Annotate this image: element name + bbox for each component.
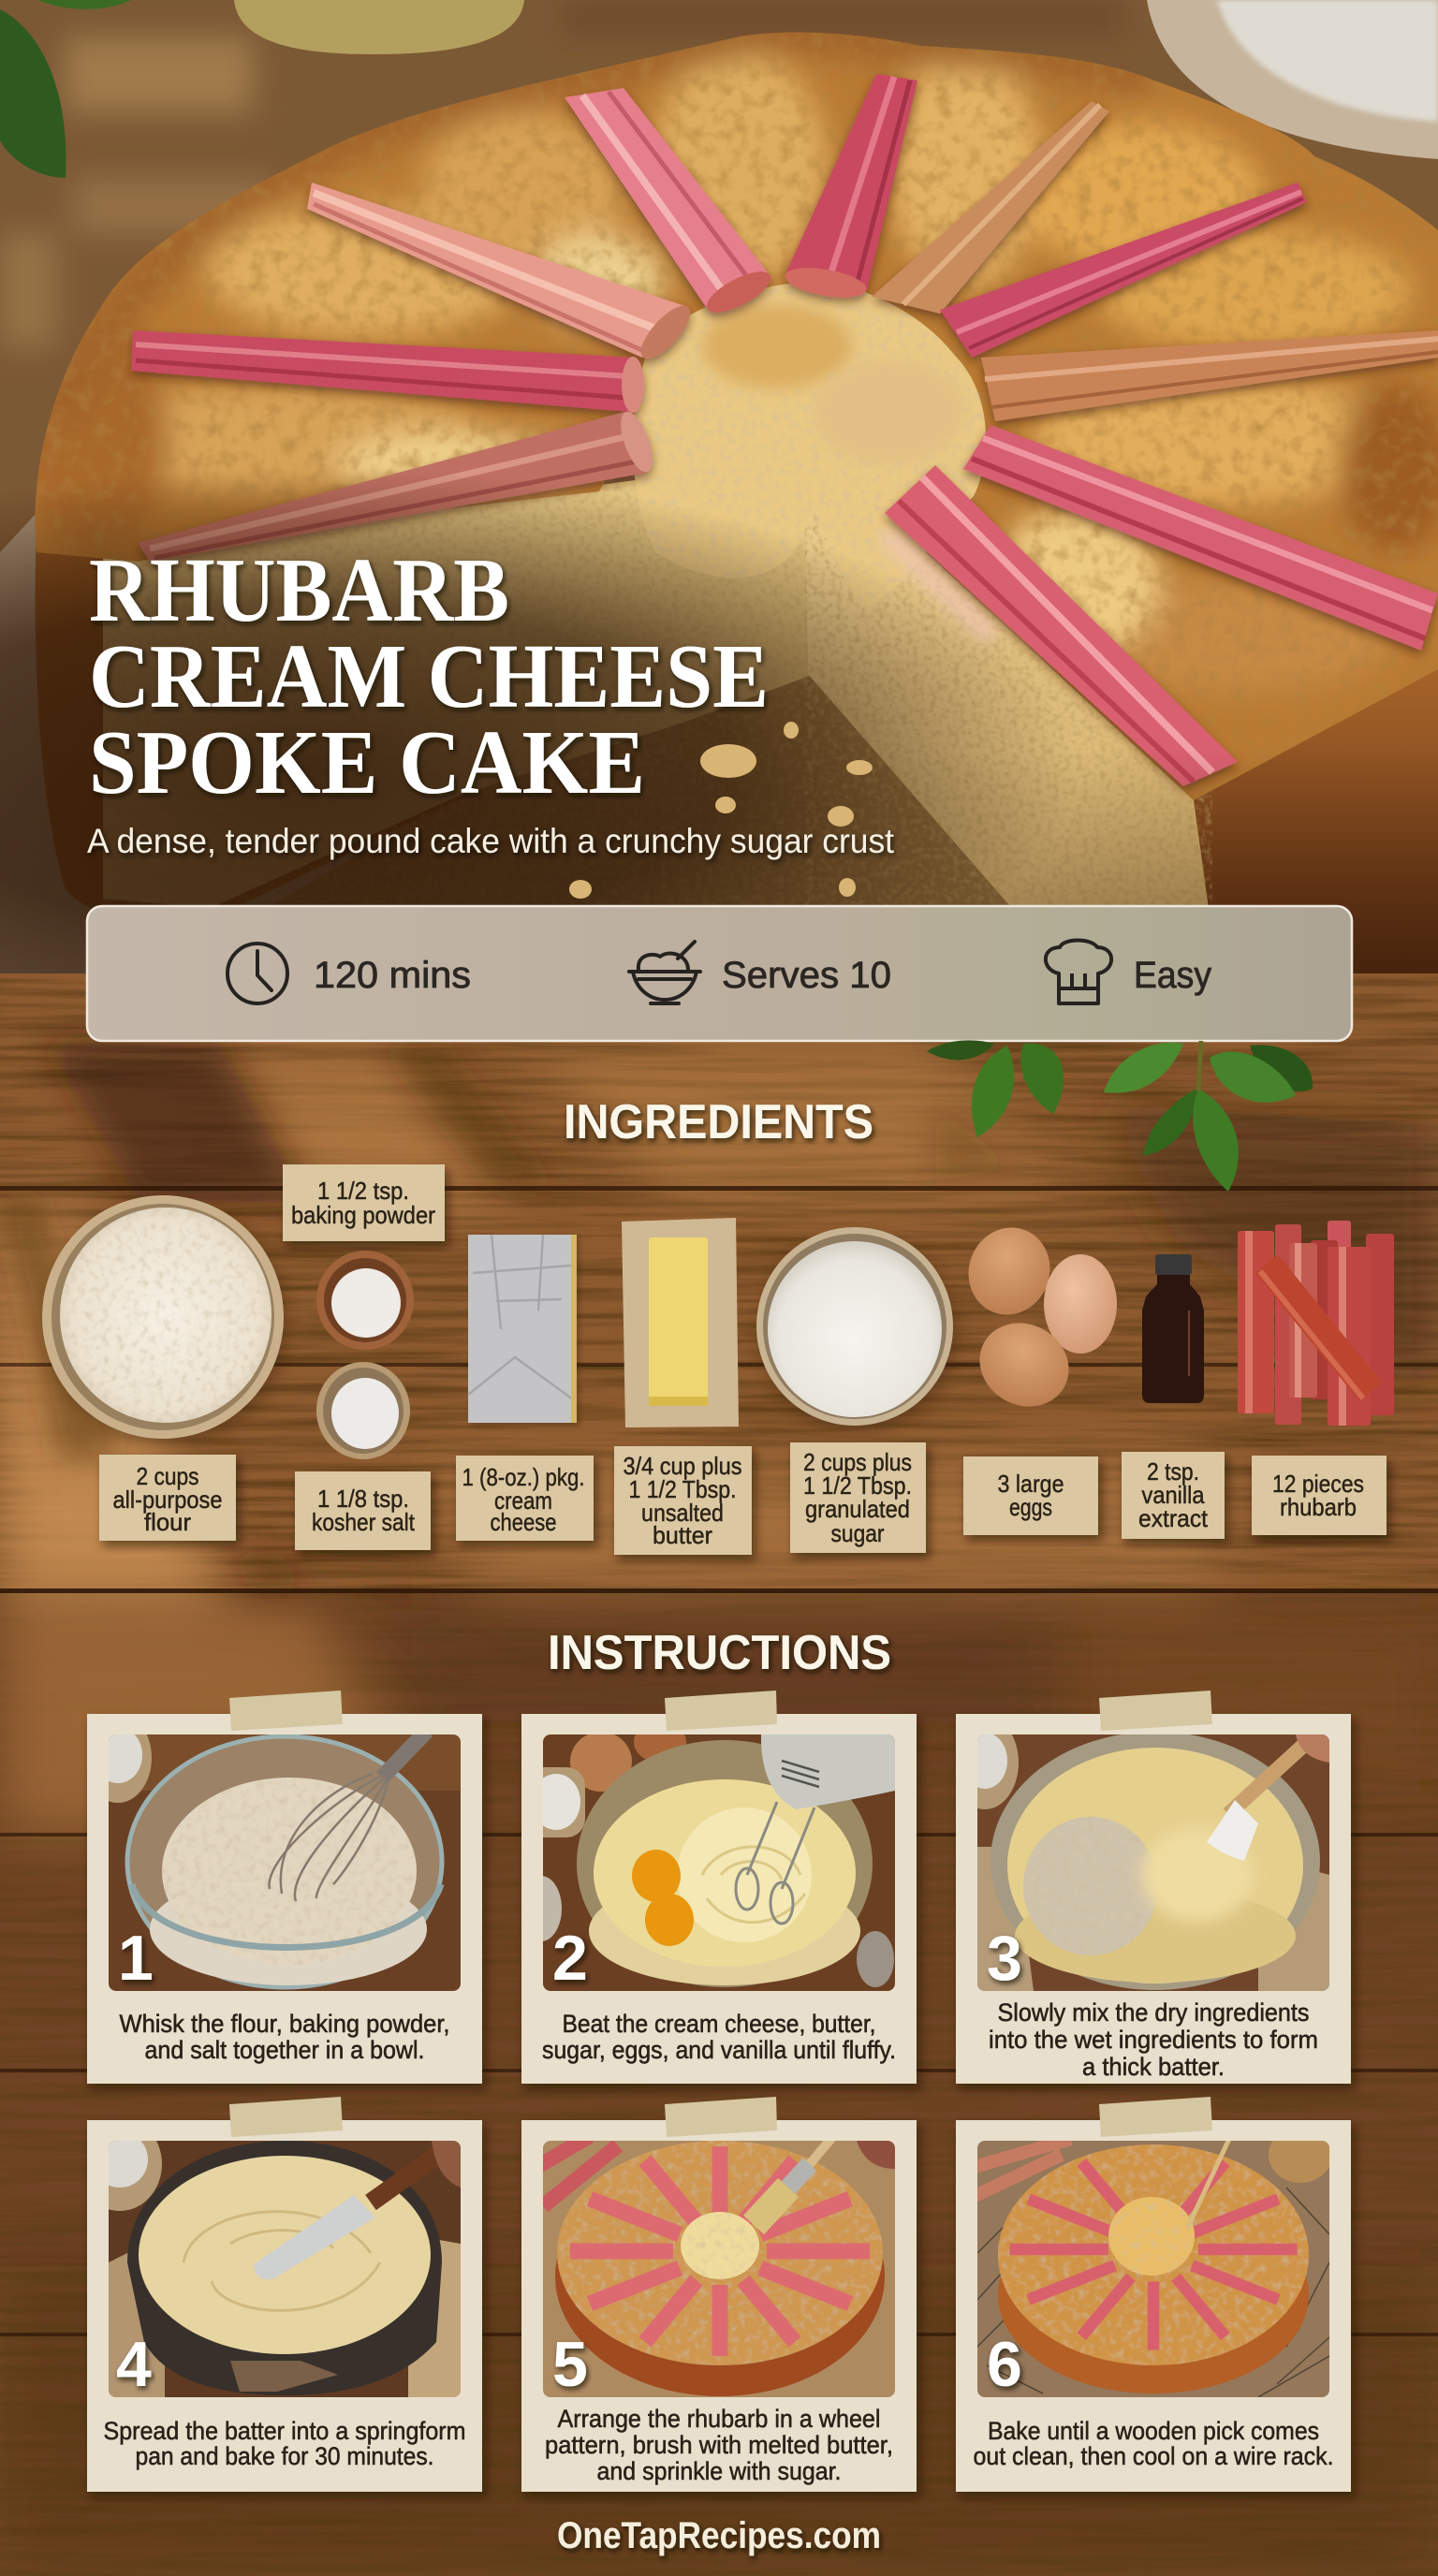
caption: a thick batter. — [1082, 2053, 1225, 2081]
label: flour: flour — [144, 1508, 191, 1536]
icon: clock — [227, 944, 287, 1003]
crumb centre mound — [633, 281, 986, 608]
heading: instructions: INSTRUCTIONS — [548, 1626, 891, 1680]
label: vanilla: vanilla — [1142, 1481, 1205, 1509]
label: cream cheese: cream — [494, 1486, 552, 1515]
step card 1 — [84, 1690, 482, 2084]
label: vanilla — [1122, 1452, 1225, 1539]
label: rhubarb: rhubarb — [1280, 1493, 1357, 1521]
tape — [229, 1690, 343, 1731]
label: rhubarb: 12 pieces — [1272, 1470, 1364, 1498]
ingredient: eggs — [957, 1216, 1117, 1535]
caption: Beat the cream cheese, butter, — [562, 2010, 876, 2038]
wood table background — [0, 964, 1438, 2576]
caption: pan and bake for 30 minutes. — [135, 2442, 434, 2470]
photo: whisking flour — [109, 1734, 461, 1991]
ingredient: flour — [42, 1195, 287, 1541]
label: rhubarb — [1252, 1456, 1387, 1535]
tape — [1099, 2097, 1212, 2137]
photo: spreading batter in pan — [78, 2117, 461, 2397]
title: RHUBARB — [89, 540, 509, 640]
caption — [545, 2405, 893, 2485]
difficulty text: Easy — [1134, 955, 1211, 996]
title: SPOKE CAKE — [89, 712, 645, 812]
photo: arranging rhubarb — [534, 2136, 895, 2397]
footer website: OneTapRecipes.com — [557, 2515, 881, 2556]
step card 4 — [78, 2097, 482, 2492]
crumbs on plate — [569, 722, 873, 899]
label: sugar: sugar — [831, 1519, 885, 1547]
photo: cooling on rack — [968, 2127, 1332, 2397]
servings text: Serves 10 — [722, 955, 891, 996]
tape — [229, 2097, 343, 2137]
decorative leaves — [927, 1040, 1313, 1192]
ingredient: vanilla extract — [1122, 1254, 1225, 1539]
caption: pattern, brush with melted butter, — [545, 2431, 893, 2459]
spoke top — [783, 74, 917, 302]
label: butter: 1 1/2 Tbsp. — [629, 1475, 736, 1503]
tape — [665, 2097, 777, 2137]
label: cream cheese — [456, 1456, 594, 1541]
label: eggs: eggs — [1009, 1493, 1052, 1521]
caption: Spread the batter into a springform — [103, 2417, 466, 2445]
spoke lower left — [138, 408, 659, 562]
caption: Slowly mix the dry ingredients — [998, 1998, 1309, 2027]
step card 6 — [956, 2097, 1351, 2492]
label: kosher salt: 1 1/8 tsp. — [317, 1485, 409, 1513]
caption — [974, 2417, 1333, 2470]
caption — [120, 2010, 449, 2064]
rhubarb spokes — [131, 74, 1438, 786]
caption: and sprinkle with sugar. — [597, 2457, 841, 2485]
label: baking powder — [283, 1164, 445, 1241]
label: sugar: 2 cups plus — [803, 1448, 912, 1476]
label: sugar: granulated — [805, 1495, 910, 1523]
caption: Whisk the flour, baking powder, — [120, 2010, 449, 2038]
ingredient: cream cheese — [456, 1235, 594, 1541]
caption: out clean, then cool on a wire rack. — [974, 2442, 1333, 2470]
title — [89, 540, 769, 812]
left crumb face — [103, 421, 814, 908]
label: flour: 2 cups — [137, 1462, 198, 1490]
plate wedge under cut — [187, 655, 1020, 955]
icon: chef hat — [1046, 940, 1111, 1003]
icon: bowl — [629, 942, 700, 1003]
ingredient: sugar — [756, 1227, 957, 1553]
spoke top left — [565, 88, 776, 320]
caption: into the wet ingredients to form — [989, 2026, 1318, 2054]
spoke bottom right — [885, 465, 1238, 786]
heading: ingredients: INGREDIENTS — [564, 1095, 873, 1149]
tape — [665, 1690, 777, 1731]
darker baked rim — [84, 33, 1153, 352]
number: 5 — [552, 2329, 588, 2400]
caption: Bake until a wooden pick comes — [988, 2417, 1319, 2445]
tape — [1099, 1690, 1212, 1731]
caption — [542, 2010, 896, 2064]
caption: Arrange the rhubarb in a wheel — [558, 2405, 880, 2433]
label: vanilla: extract — [1138, 1504, 1209, 1532]
spoke lower right — [963, 425, 1438, 651]
label: butter: 3/4 cup plus — [624, 1452, 741, 1480]
spoke upper left — [307, 183, 697, 366]
hero backdrop wood — [0, 0, 1438, 973]
ingredient: butter — [614, 1218, 752, 1555]
spoke red right — [940, 183, 1307, 358]
label: butter: unsalted — [641, 1499, 724, 1527]
spoke tan right — [981, 330, 1438, 421]
label: cream cheese: 1 (8-oz.) pkg. — [462, 1463, 584, 1491]
label: sugar — [790, 1442, 926, 1553]
title: CREAM CHEESE — [89, 626, 769, 726]
label: eggs — [963, 1456, 1098, 1535]
light and shadow patches on table — [0, 1048, 1438, 2576]
caption: sugar, eggs, and vanilla until fluffy. — [542, 2036, 896, 2064]
right cut face — [805, 431, 1212, 936]
cake crust top — [35, 32, 1438, 800]
pink juice smear — [885, 532, 992, 638]
title darkening overlay — [0, 468, 1438, 973]
label: cream cheese: cheese — [491, 1508, 556, 1536]
serving plate — [0, 513, 1049, 973]
ingredient: rhubarb — [1238, 1221, 1394, 1535]
photo: beating batter — [543, 1734, 895, 1991]
cake outer side — [36, 524, 468, 920]
number: 1 — [118, 1923, 154, 1994]
step card 2 — [521, 1690, 917, 2084]
label: baking powder: baking powder — [291, 1201, 435, 1229]
spoke left — [131, 330, 644, 413]
leaf top left — [0, 0, 131, 178]
spoke tan top right — [872, 101, 1109, 314]
number: 2 — [552, 1923, 588, 1994]
plank gaps — [0, 1186, 1438, 2336]
number: 6 — [987, 2329, 1022, 2400]
label: butter: butter — [653, 1521, 712, 1549]
ingredient: baking powder — [283, 1164, 445, 1350]
label: butter — [614, 1446, 752, 1555]
step card 3 — [951, 1690, 1351, 2084]
label: baking powder: 1 1/2 tsp. — [317, 1177, 409, 1205]
subtitle: A dense, tender pound cake with a crunchy sugar crust — [87, 822, 895, 860]
caption — [989, 1998, 1318, 2081]
caption — [103, 2417, 466, 2470]
step card 5 — [521, 2097, 917, 2492]
stats panel — [87, 906, 1352, 1041]
plate top right — [1147, 0, 1438, 159]
time text: 120 mins — [314, 955, 471, 996]
caption: and salt together in a bowl. — [144, 2036, 425, 2064]
label: eggs: 3 large — [998, 1470, 1064, 1498]
number: 4 — [116, 2329, 152, 2400]
label: flour — [99, 1455, 236, 1541]
diagonal shadow bands — [0, 1044, 1020, 1591]
label: kosher salt — [295, 1471, 431, 1550]
photo: mixing dry into wet — [977, 1734, 1329, 1991]
label: flour: all-purpose — [112, 1486, 223, 1514]
glass jar top — [234, 0, 524, 54]
number: 3 — [987, 1923, 1022, 1994]
label: sugar: 1 1/2 Tbsp. — [803, 1471, 912, 1500]
label: kosher salt: kosher salt — [312, 1508, 416, 1536]
hero photo: rhubarb spoke cake — [0, 0, 1438, 973]
ingredient: kosher salt — [295, 1362, 431, 1550]
label: vanilla: 2 tsp. — [1147, 1457, 1199, 1486]
